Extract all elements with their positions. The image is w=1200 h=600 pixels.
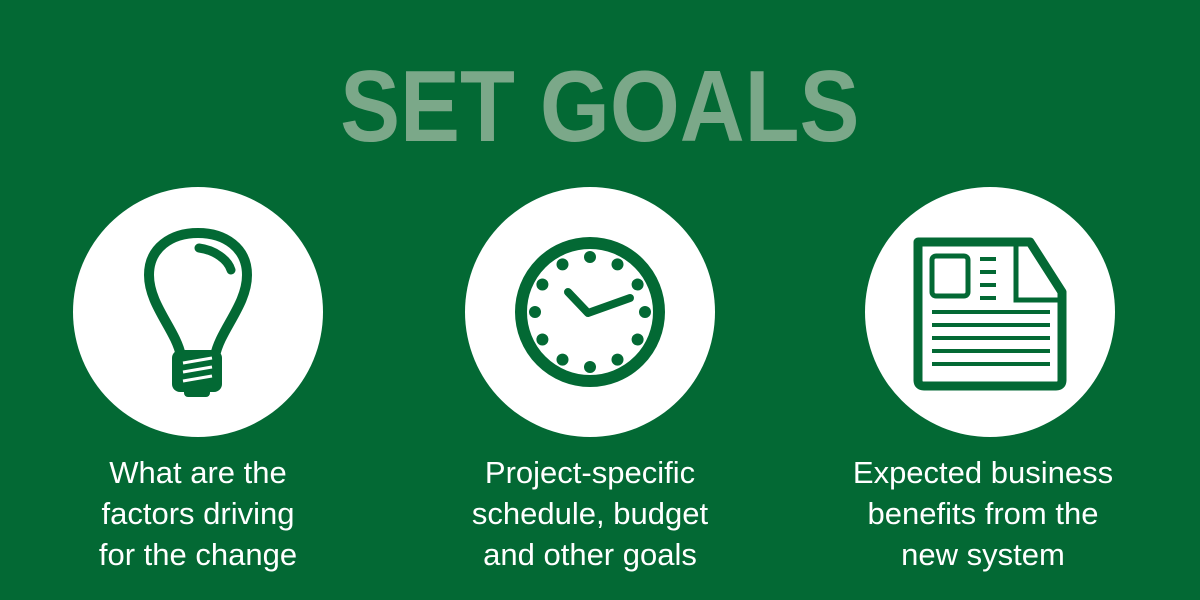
text: left <box>99 455 297 572</box>
text: middle: and other goals <box>483 537 697 572</box>
icon: clock <box>465 187 715 437</box>
icon: document <box>865 187 1115 437</box>
text: left: What are the <box>109 455 287 490</box>
text: middle <box>472 455 708 572</box>
text: middle: Project-specific <box>485 455 695 490</box>
text: left: factors driving <box>102 496 294 531</box>
text: right: Expected business <box>853 455 1113 490</box>
text: right: new system <box>901 537 1065 572</box>
text: middle: schedule, budget <box>472 496 708 531</box>
text: right: benefits from the <box>868 496 1098 531</box>
text: left: for the change <box>99 537 297 572</box>
icon: light bulb <box>73 187 323 437</box>
title: SET GOALS <box>340 51 860 163</box>
text: right <box>853 455 1113 572</box>
